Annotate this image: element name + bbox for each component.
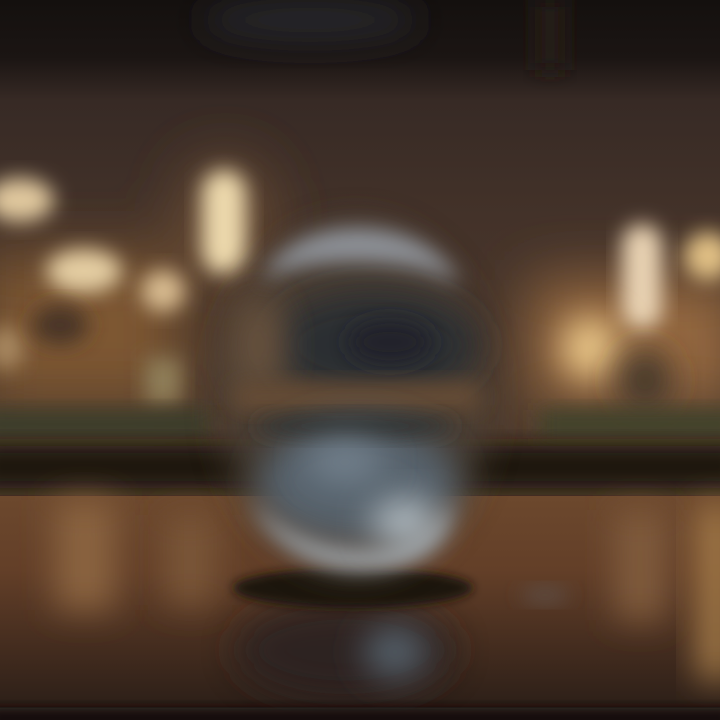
lower bright crescent: [250, 500, 455, 570]
centre blue reflection: [305, 440, 385, 484]
right bokeh lights: [562, 224, 720, 410]
ball body: [220, 223, 490, 573]
lower blue interior: [258, 420, 458, 544]
left bokeh lights: [0, 170, 246, 404]
top highlight: [262, 228, 460, 284]
dark centre detail: [348, 320, 432, 364]
table: [0, 496, 720, 708]
dark band: [0, 446, 720, 488]
crystal ball: [220, 223, 490, 573]
dark horizon: [255, 414, 455, 438]
refracted left glow: [232, 295, 284, 395]
bright lower reflection: [371, 498, 439, 546]
upper dark interior: [270, 290, 480, 400]
green shelf: [0, 410, 720, 438]
refracted brown band: [232, 382, 482, 412]
table front edge: [0, 707, 720, 720]
warm glow behind the shelves: [0, 160, 720, 405]
ball base: [233, 568, 473, 608]
